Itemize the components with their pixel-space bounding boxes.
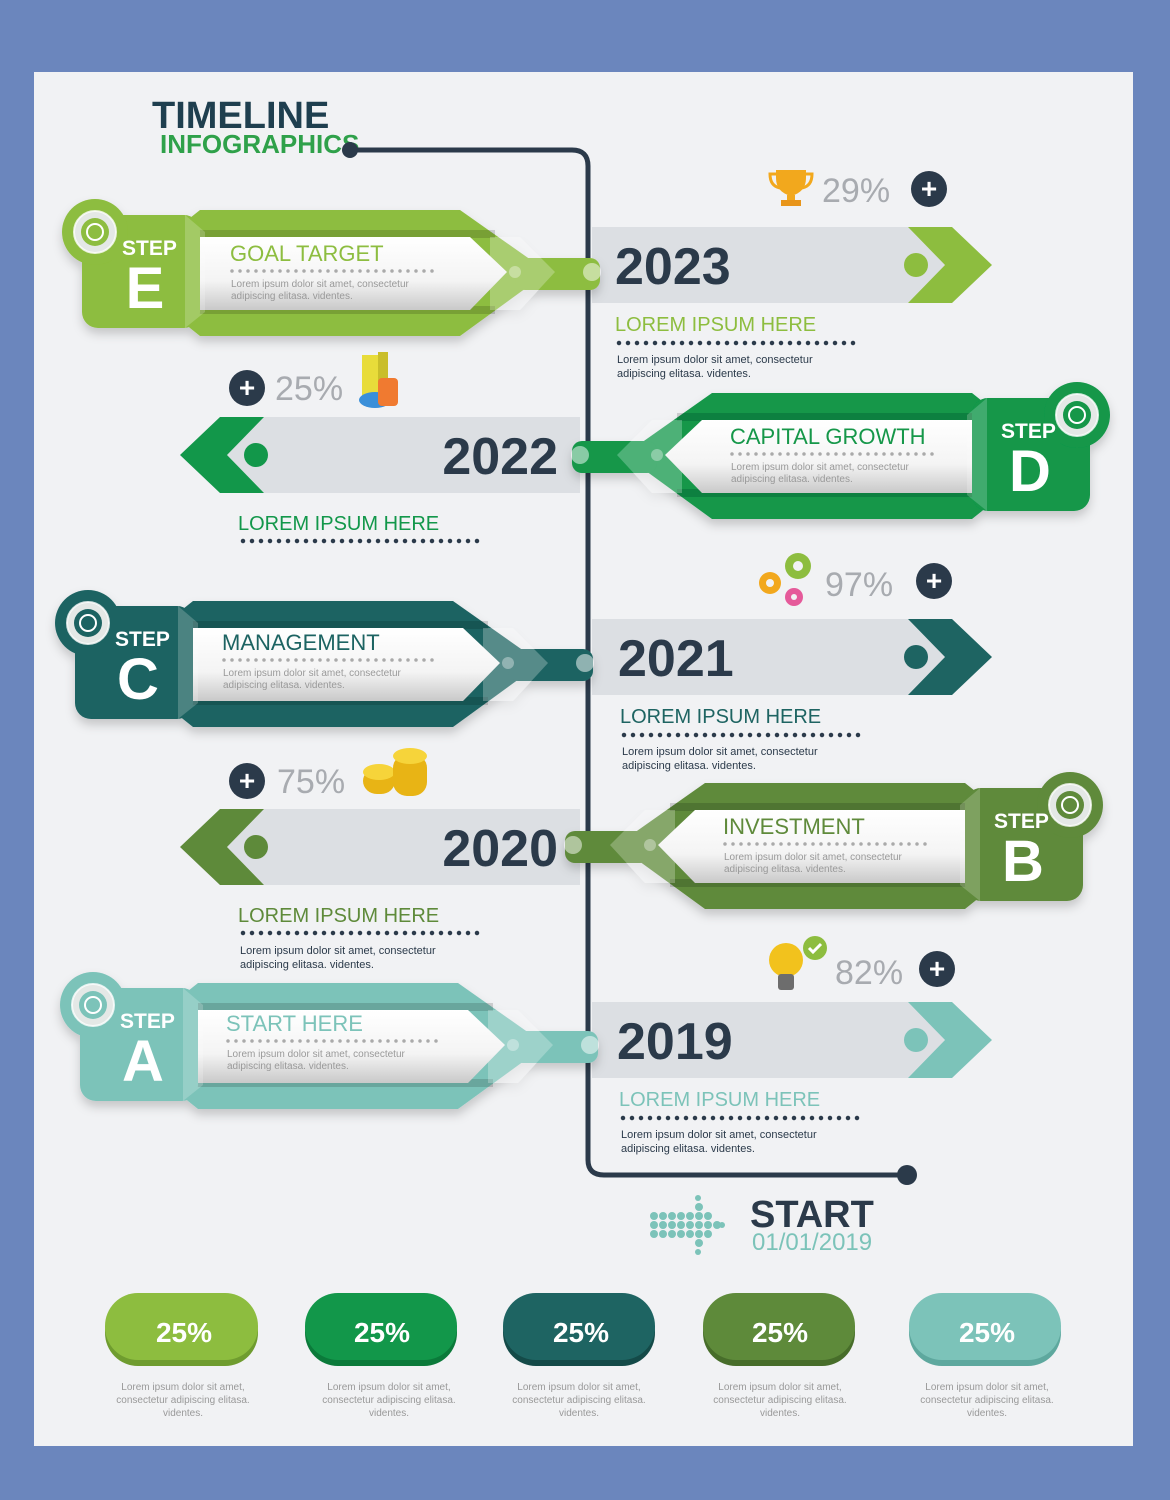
label 2020: [238, 905, 482, 971]
stat 97% with gears: +: [926, 565, 942, 596]
step A: adipiscing elitasa. videntes.: [227, 1061, 349, 1072]
title: TIMELINE: [152, 95, 329, 137]
year: 2019: [592, 1002, 992, 1078]
stat 82% with bulb: 82%: [835, 954, 903, 992]
label 2020: Lorem ipsum dolor sit amet, consectetur: [240, 945, 436, 957]
stat 25% with chart: +: [239, 372, 255, 403]
title: [152, 95, 359, 159]
stat 29% with trophy: 29%: [822, 172, 890, 210]
step E: adipiscing elitasa. videntes.: [231, 291, 353, 302]
label 2023: adipiscing elitasa. videntes.: [617, 368, 751, 380]
pill 2: consectetur adipiscing elitasa.: [322, 1395, 456, 1406]
step D: [571, 382, 1110, 519]
year: 2022: [180, 417, 580, 493]
label 2021: Lorem ipsum dolor sit amet, consectetur: [622, 746, 818, 758]
year: 2020: 2020: [442, 820, 558, 878]
step C: MANAGEMENT: [222, 630, 380, 655]
year: 2021: 2021: [618, 630, 734, 688]
step B: adipiscing elitasa. videntes.: [724, 864, 846, 875]
label 2021: LOREM IPSUM HERE: [620, 706, 821, 728]
pill 3: Lorem ipsum dolor sit amet,: [517, 1382, 641, 1393]
stat 97% with gears: 97%: [825, 566, 893, 604]
year: 2019: 2019: [617, 1013, 733, 1071]
step E: Lorem ipsum dolor sit amet, consectetur: [231, 279, 410, 290]
pill 3: videntes.: [559, 1408, 599, 1419]
step D: STEP: [1001, 420, 1056, 443]
label 2023: Lorem ipsum dolor sit amet, consectetur: [617, 354, 813, 366]
step A: [60, 972, 599, 1109]
step E: STEP: [122, 237, 177, 260]
step D: adipiscing elitasa. videntes.: [731, 474, 853, 485]
pill 4: 25%: [752, 1317, 808, 1348]
label 2021: adipiscing elitasa. videntes.: [622, 760, 756, 772]
label 2020: adipiscing elitasa. videntes.: [240, 959, 374, 971]
step B: STEP: [994, 810, 1049, 833]
stat 97% with gears: [759, 553, 952, 606]
pill 5: Lorem ipsum dolor sit amet,: [925, 1382, 1049, 1393]
year: 2023: [592, 227, 992, 303]
step A: Lorem ipsum dolor sit amet, consectetur: [227, 1049, 406, 1060]
pill 3: 25%: [553, 1317, 609, 1348]
step D: D: [1009, 439, 1051, 504]
title: INFOGRAPHICS: [160, 129, 359, 159]
pill 4: [703, 1293, 855, 1419]
label 2020: LOREM IPSUM HERE: [238, 905, 439, 927]
stat 82% with bulb: [769, 936, 955, 992]
step C: STEP: [115, 628, 170, 651]
step C: C: [117, 647, 159, 712]
stat 29% with trophy: [770, 170, 947, 210]
pill 4: Lorem ipsum dolor sit amet,: [718, 1382, 842, 1393]
start marker: 01/01/2019: [752, 1229, 872, 1256]
label 2019: Lorem ipsum dolor sit amet, consectetur: [621, 1129, 817, 1141]
label 2021: [620, 706, 863, 772]
label 2019: [619, 1089, 862, 1155]
pill 5: [909, 1293, 1061, 1419]
label 2023: [615, 314, 858, 380]
stat 29% with trophy: +: [921, 173, 937, 204]
step C: Lorem ipsum dolor sit amet, consectetur: [223, 668, 402, 679]
pill 1: 25%: [156, 1317, 212, 1348]
year: 2023: 2023: [615, 238, 731, 296]
stat 75% with coins: [229, 748, 427, 801]
pill 1: [105, 1293, 258, 1419]
step D: CAPITAL GROWTH: [730, 424, 926, 449]
pill 2: Lorem ipsum dolor sit amet,: [327, 1382, 451, 1393]
pill 1: consectetur adipiscing elitasa.: [116, 1395, 250, 1406]
start marker: START: [750, 1194, 874, 1236]
pill 5: 25%: [959, 1317, 1015, 1348]
pill 5: consectetur adipiscing elitasa.: [920, 1395, 1054, 1406]
pill 5: videntes.: [967, 1408, 1007, 1419]
pill 2: videntes.: [369, 1408, 409, 1419]
pill 4: consectetur adipiscing elitasa.: [713, 1395, 847, 1406]
step E: [62, 199, 601, 336]
step C: adipiscing elitasa. videntes.: [223, 680, 345, 691]
step E: GOAL TARGET: [230, 241, 384, 266]
step B: B: [1002, 829, 1044, 894]
pill 2: [305, 1293, 457, 1419]
step B: INVESTMENT: [723, 814, 865, 839]
year: 2022: 2022: [442, 428, 558, 486]
year: 2020: [180, 809, 580, 885]
stat 75% with coins: +: [239, 765, 255, 796]
pill 1: videntes.: [163, 1408, 203, 1419]
pill 4: videntes.: [760, 1408, 800, 1419]
step A: A: [122, 1029, 164, 1094]
step A: STEP: [120, 1010, 175, 1033]
pill 1: Lorem ipsum dolor sit amet,: [121, 1382, 245, 1393]
step B: Lorem ipsum dolor sit amet, consectetur: [724, 852, 903, 863]
label 2022: LOREM IPSUM HERE: [238, 513, 439, 535]
step D: Lorem ipsum dolor sit amet, consectetur: [731, 462, 910, 473]
step A: START HERE: [226, 1011, 363, 1036]
label 2019: LOREM IPSUM HERE: [619, 1089, 820, 1111]
stat 82% with bulb: +: [929, 953, 945, 984]
stat 25% with chart: 25%: [275, 370, 343, 408]
pill 2: 25%: [354, 1317, 410, 1348]
label 2019: adipiscing elitasa. videntes.: [621, 1143, 755, 1155]
stat 25% with chart: [229, 352, 398, 408]
label 2023: LOREM IPSUM HERE: [615, 314, 816, 336]
timeline line: [342, 142, 917, 1185]
step C: [55, 590, 594, 727]
step E: E: [126, 256, 164, 321]
stat 75% with coins: 75%: [277, 763, 345, 801]
year: 2021: [592, 619, 992, 695]
start marker: [650, 1194, 874, 1256]
pill 3: [503, 1293, 655, 1419]
pill 3: consectetur adipiscing elitasa.: [512, 1395, 646, 1406]
step B: [564, 772, 1103, 909]
